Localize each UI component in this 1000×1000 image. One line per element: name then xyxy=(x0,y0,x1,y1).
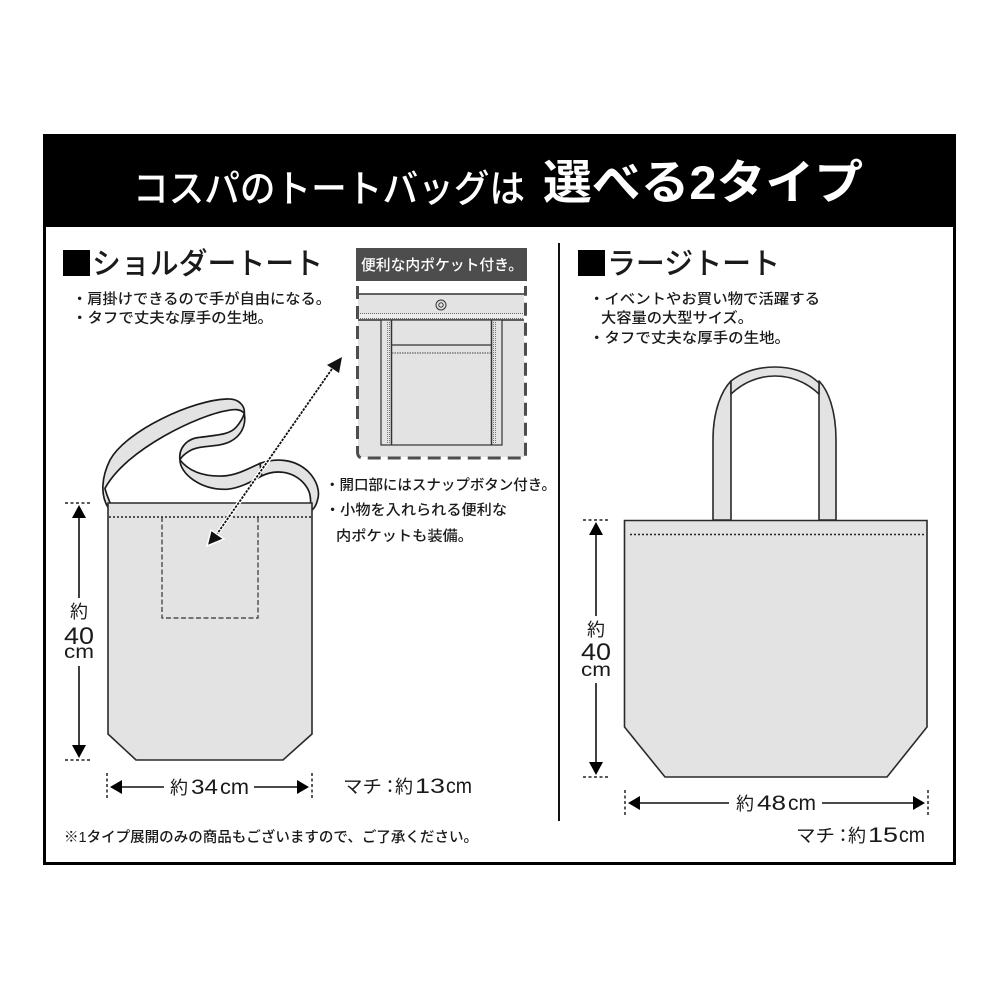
heading: shoulder tote: ショルダートート xyxy=(92,248,323,281)
gusset: large tote: 約 xyxy=(848,826,866,846)
gusset: large tote: マチ xyxy=(796,826,835,846)
pocket feature notes xyxy=(325,477,556,545)
pocket panel heading: 便利な内ポケット付き。 xyxy=(361,257,523,274)
title banner xyxy=(43,134,955,227)
gusset: large tote: 15 xyxy=(868,824,898,847)
large tote feature list: 大容量の大型サイズ。 xyxy=(601,309,753,327)
shoulder tote feature list: ・タフで丈夫な厚手の生地。 xyxy=(72,310,273,327)
width dimension: large tote: 48 xyxy=(757,792,786,815)
shoulder strap xyxy=(103,399,318,511)
large tote feature list xyxy=(589,291,820,347)
width dimension: shoulder tote xyxy=(107,773,312,800)
height dimension: large tote xyxy=(581,520,611,777)
width dimension: large tote: 約 xyxy=(736,794,754,814)
gusset: large tote: cm xyxy=(899,824,925,847)
width dimension: large tote xyxy=(625,790,928,817)
tote body xyxy=(624,520,927,777)
column divider xyxy=(558,243,560,821)
large tote illustration xyxy=(624,367,927,777)
shoulder tote feature list: ・肩掛けできるので手が自由になる。 xyxy=(72,290,331,308)
gusset: large tote: ： xyxy=(834,826,852,846)
width dimension: shoulder tote: 34 xyxy=(191,776,218,799)
handle xyxy=(713,367,836,520)
height dimension: shoulder tote: 約 xyxy=(70,602,88,622)
width dimension: large tote: cm xyxy=(788,792,816,815)
width dimension: shoulder tote: 約 xyxy=(170,778,188,798)
pocket feature notes: 内ポケットも装備。 xyxy=(336,528,473,545)
pocket illustration xyxy=(358,286,526,458)
outer frame xyxy=(44,136,954,864)
pocket outline xyxy=(162,517,258,618)
shoulder tote illustration xyxy=(103,399,318,760)
pocket feature notes: ・小物を入れられる便利な xyxy=(325,502,507,519)
top stitching xyxy=(630,534,926,536)
pocket panel heading xyxy=(356,248,527,281)
large tote feature list: ・タフで丈夫な厚手の生地。 xyxy=(589,330,790,347)
gusset: shoulder tote: cm xyxy=(446,775,472,798)
gusset: shoulder tote: 約 xyxy=(395,777,413,797)
pocket feature notes: ・開口部にはスナップボタン付き。 xyxy=(325,477,556,494)
title banner: コスパのトートバッグは xyxy=(133,169,525,211)
height dimension: large tote: cm xyxy=(581,660,611,681)
title banner: 選べる2タイプ xyxy=(543,156,863,209)
height dimension: shoulder tote: 40 xyxy=(64,623,94,650)
arrow linking pocket to detail panel xyxy=(207,357,342,546)
inner pocket detail panel xyxy=(356,248,527,458)
height dimension: shoulder tote: cm xyxy=(64,642,94,663)
height dimension: shoulder tote xyxy=(64,503,94,760)
height dimension: large tote: 約 xyxy=(587,620,605,640)
gusset: shoulder tote: 13 xyxy=(415,775,445,798)
footnote: ※1タイプ展開のみの商品もございますので、ご了承ください。 xyxy=(64,828,478,846)
tote body xyxy=(108,503,312,760)
large tote feature list: ・イベントやお買い物で活躍する xyxy=(589,291,820,308)
heading: large tote: ラージトート xyxy=(607,248,780,281)
gusset: shoulder tote: ： xyxy=(381,777,399,797)
shoulder tote feature list xyxy=(72,290,331,327)
gusset: shoulder tote: マチ xyxy=(343,777,382,797)
top stitching xyxy=(109,516,311,518)
height dimension: large tote: 40 xyxy=(581,639,611,666)
width dimension: shoulder tote: cm xyxy=(220,776,249,799)
